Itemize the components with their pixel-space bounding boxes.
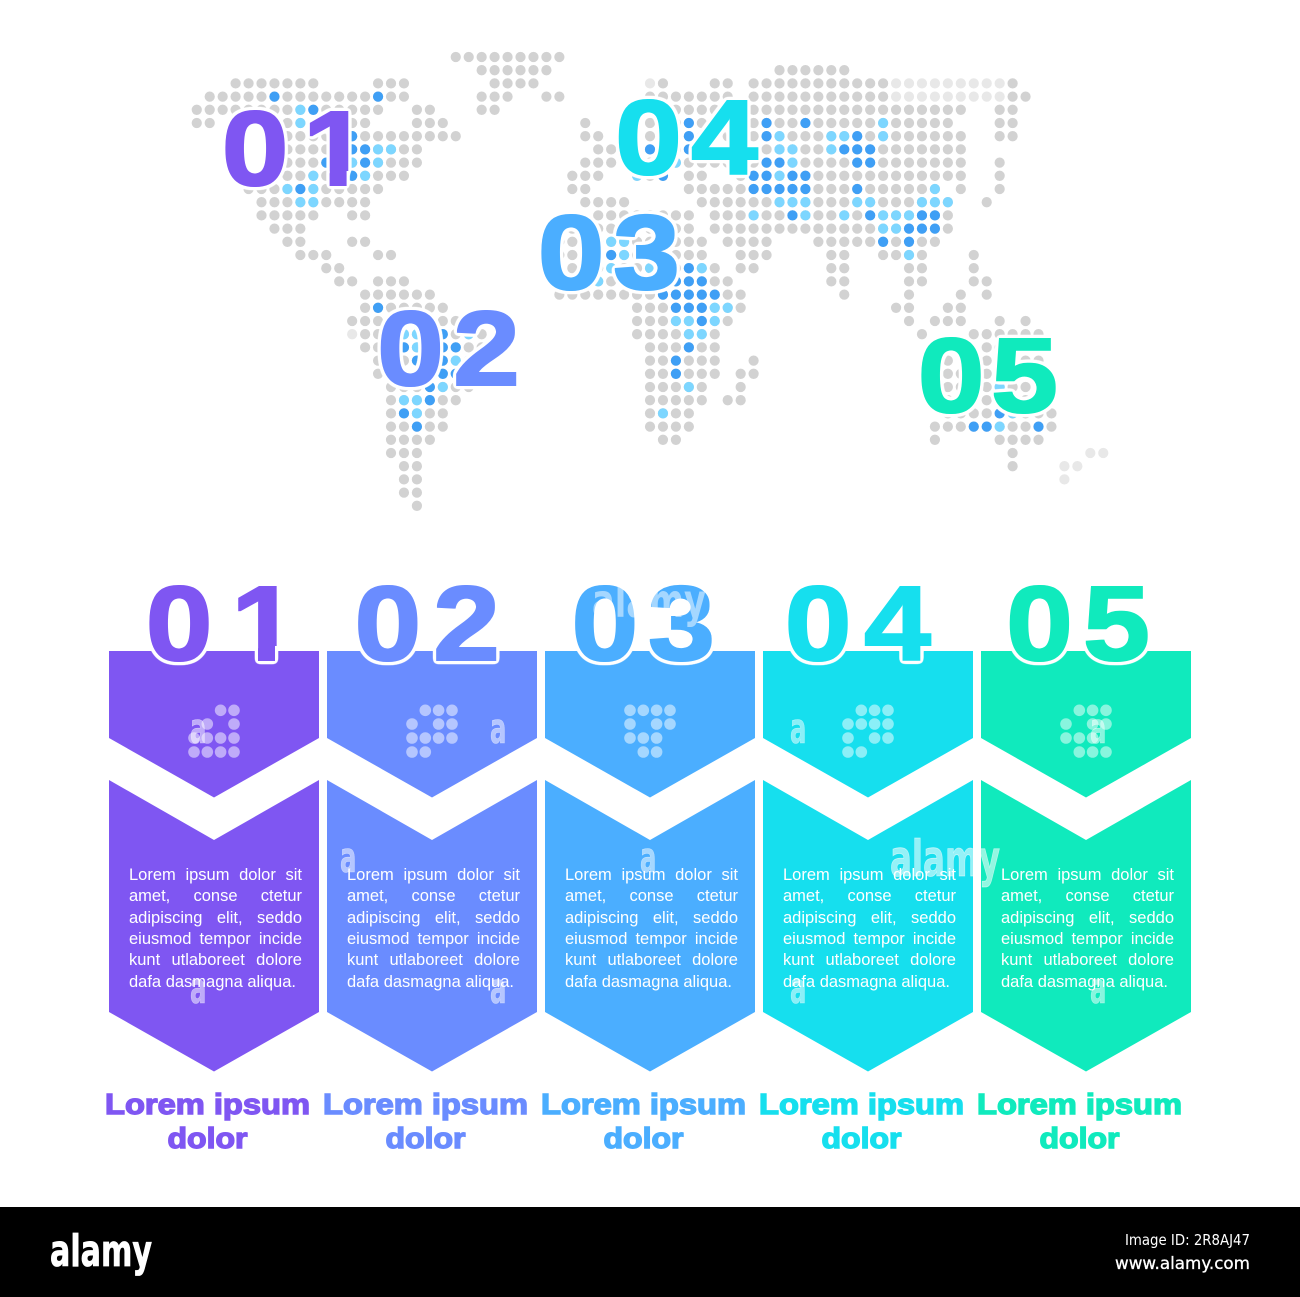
panel 5 <box>977 565 1191 1155</box>
big number 05 <box>1006 565 1150 683</box>
panel title: dolor <box>822 1123 902 1155</box>
big number 03: 3 <box>648 565 715 683</box>
big number 01 <box>149 585 278 666</box>
watermark over number: alamy <box>592 574 706 628</box>
watermark letters: a <box>190 965 206 1014</box>
panel text: dafa dasmagna aliqua. <box>347 973 514 991</box>
panel text: Lorem ipsum dolor sit <box>1001 866 1174 884</box>
big number 02 <box>354 565 500 683</box>
panel text: eiusmod tempor incide <box>565 930 738 948</box>
map marker 01: 1 <box>303 90 370 208</box>
panel title: Lorem ipsum <box>323 1089 528 1121</box>
map marker 03: 0 <box>538 194 605 312</box>
panel title: dolor <box>168 1123 248 1155</box>
center watermark: alamy <box>890 830 1000 888</box>
watermark letter: a <box>640 834 656 883</box>
panel text: dafa dasmagna aliqua. <box>1001 973 1168 991</box>
world map with numbered markers <box>192 52 1108 511</box>
map marker 05: 0 <box>918 317 985 435</box>
panel text: amet, conse ctetur <box>347 887 520 905</box>
panel text: eiusmod tempor incide <box>1001 930 1174 948</box>
upper arrow shape <box>981 651 1191 798</box>
lower arrow shape <box>109 780 319 1072</box>
panel text: amet, conse ctetur <box>1001 887 1174 905</box>
panel 3 <box>541 565 755 1155</box>
map marker 01 <box>225 106 352 190</box>
panel text: dafa dasmagna aliqua. <box>565 973 732 991</box>
panel title: dolor <box>1040 1123 1120 1155</box>
dot icon <box>188 704 240 758</box>
panel text: adipiscing elit, seddo <box>565 909 738 927</box>
panel text: Lorem ipsum dolor sit <box>129 866 302 884</box>
panel title: Lorem ipsum <box>541 1089 746 1121</box>
panel title: dolor <box>386 1123 466 1155</box>
big number 01: 1 <box>231 565 298 683</box>
panel text: eiusmod tempor incide <box>347 930 520 948</box>
map marker 04: 4 <box>691 79 758 197</box>
map marker 01: 0 <box>222 90 289 208</box>
upper arrow shape <box>327 651 537 798</box>
image id: Image ID: 2R8AJ47 <box>1125 1231 1250 1249</box>
panel text <box>1001 866 1174 991</box>
watermark letters: a <box>490 705 506 754</box>
panel text: Lorem ipsum dolor sit <box>783 866 956 884</box>
lower arrow shape <box>763 780 973 1072</box>
gray land dots <box>197 57 1052 506</box>
panel text: adipiscing elit, seddo <box>129 909 302 927</box>
big number 03 <box>571 565 715 683</box>
watermark letters <box>340 705 506 1014</box>
panel text <box>129 866 302 991</box>
map marker 03: 3 <box>613 194 680 312</box>
big number 04 <box>785 565 931 683</box>
watermark letters <box>190 705 206 1014</box>
panel text: amet, conse ctetur <box>565 887 738 905</box>
faded dots under watermark <box>352 83 1103 479</box>
panel text: eiusmod tempor incide <box>783 930 956 948</box>
panel text: eiusmod tempor incide <box>129 930 302 948</box>
panel text: amet, conse ctetur <box>783 887 956 905</box>
dark blue highlight dots <box>274 97 1039 427</box>
dot icon <box>842 704 894 758</box>
lower arrow shape <box>545 780 755 1072</box>
lower arrow shape <box>981 780 1191 1072</box>
upper arrow shape <box>545 651 755 798</box>
panel title: Lorem ipsum <box>759 1089 964 1121</box>
watermark letters: a <box>190 705 206 754</box>
map marker 05: 5 <box>991 317 1058 435</box>
dotted continents <box>197 57 1103 506</box>
panel text: kunt utlaboreet dolore <box>1001 951 1174 969</box>
panel text <box>347 866 520 991</box>
map marker 04: 0 <box>615 79 682 197</box>
panel title: dolor <box>604 1123 684 1155</box>
watermark letters: a <box>1090 965 1106 1014</box>
panel text: dafa dasmagna aliqua. <box>129 973 296 991</box>
map marker 03 <box>538 194 680 312</box>
watermark letters <box>790 705 806 1014</box>
panel 1 <box>105 565 319 1155</box>
map marker 02 <box>377 290 520 408</box>
panel text: dafa dasmagna aliqua. <box>783 973 950 991</box>
big number 04: 0 <box>785 565 852 683</box>
big number 03: 0 <box>571 565 638 683</box>
watermark letters: a <box>790 705 806 754</box>
panel title <box>105 1089 310 1155</box>
footer logo: alamy <box>50 1226 152 1277</box>
panel title: Lorem ipsum <box>105 1089 310 1121</box>
panel text: kunt utlaboreet dolore <box>565 951 738 969</box>
watermark letters: a <box>790 965 806 1014</box>
panel 2 <box>323 565 537 1155</box>
footer bar <box>0 1207 1300 1297</box>
watermark letters: a <box>1090 705 1106 754</box>
panel text: Lorem ipsum dolor sit <box>565 866 738 884</box>
upper arrow shape <box>763 651 973 798</box>
big number 05: 0 <box>1006 565 1073 683</box>
map marker 02: 2 <box>453 290 520 408</box>
lower arrow shape <box>327 780 537 1072</box>
watermark letters: a <box>340 834 356 883</box>
map marker 04 <box>615 79 758 197</box>
dot icon <box>406 704 458 758</box>
panel title <box>541 1089 746 1155</box>
big number 02: 0 <box>354 565 421 683</box>
panel text: Lorem ipsum dolor sit <box>347 866 520 884</box>
big number 05: 5 <box>1083 565 1150 683</box>
panel text <box>565 866 738 991</box>
big number 01: 0 <box>146 565 213 683</box>
panel title <box>759 1089 964 1155</box>
panel text: adipiscing elit, seddo <box>783 909 956 927</box>
map marker 02: 0 <box>377 290 444 408</box>
map marker 05 <box>918 317 1058 435</box>
website: www.alamy.com <box>1115 1254 1250 1274</box>
panel text <box>783 866 956 991</box>
big number 02: 2 <box>433 565 500 683</box>
panel text: adipiscing elit, seddo <box>347 909 520 927</box>
dot icon <box>1060 704 1112 758</box>
watermark letters <box>1090 705 1106 1014</box>
panel text: amet, conse ctetur <box>129 887 302 905</box>
panel text: kunt utlaboreet dolore <box>129 951 302 969</box>
panel text: adipiscing elit, seddo <box>1001 909 1174 927</box>
upper arrow shape <box>109 651 319 798</box>
panel title <box>977 1089 1182 1155</box>
panel 4 <box>759 565 973 1155</box>
dot icon <box>624 704 676 758</box>
watermark letters: a <box>490 965 506 1014</box>
panel text: kunt utlaboreet dolore <box>783 951 956 969</box>
panel text: kunt utlaboreet dolore <box>347 951 520 969</box>
light blue highlight dots <box>287 110 1013 427</box>
big number 04: 4 <box>864 565 931 683</box>
panel title <box>323 1089 528 1155</box>
panel title: Lorem ipsum <box>977 1089 1182 1121</box>
